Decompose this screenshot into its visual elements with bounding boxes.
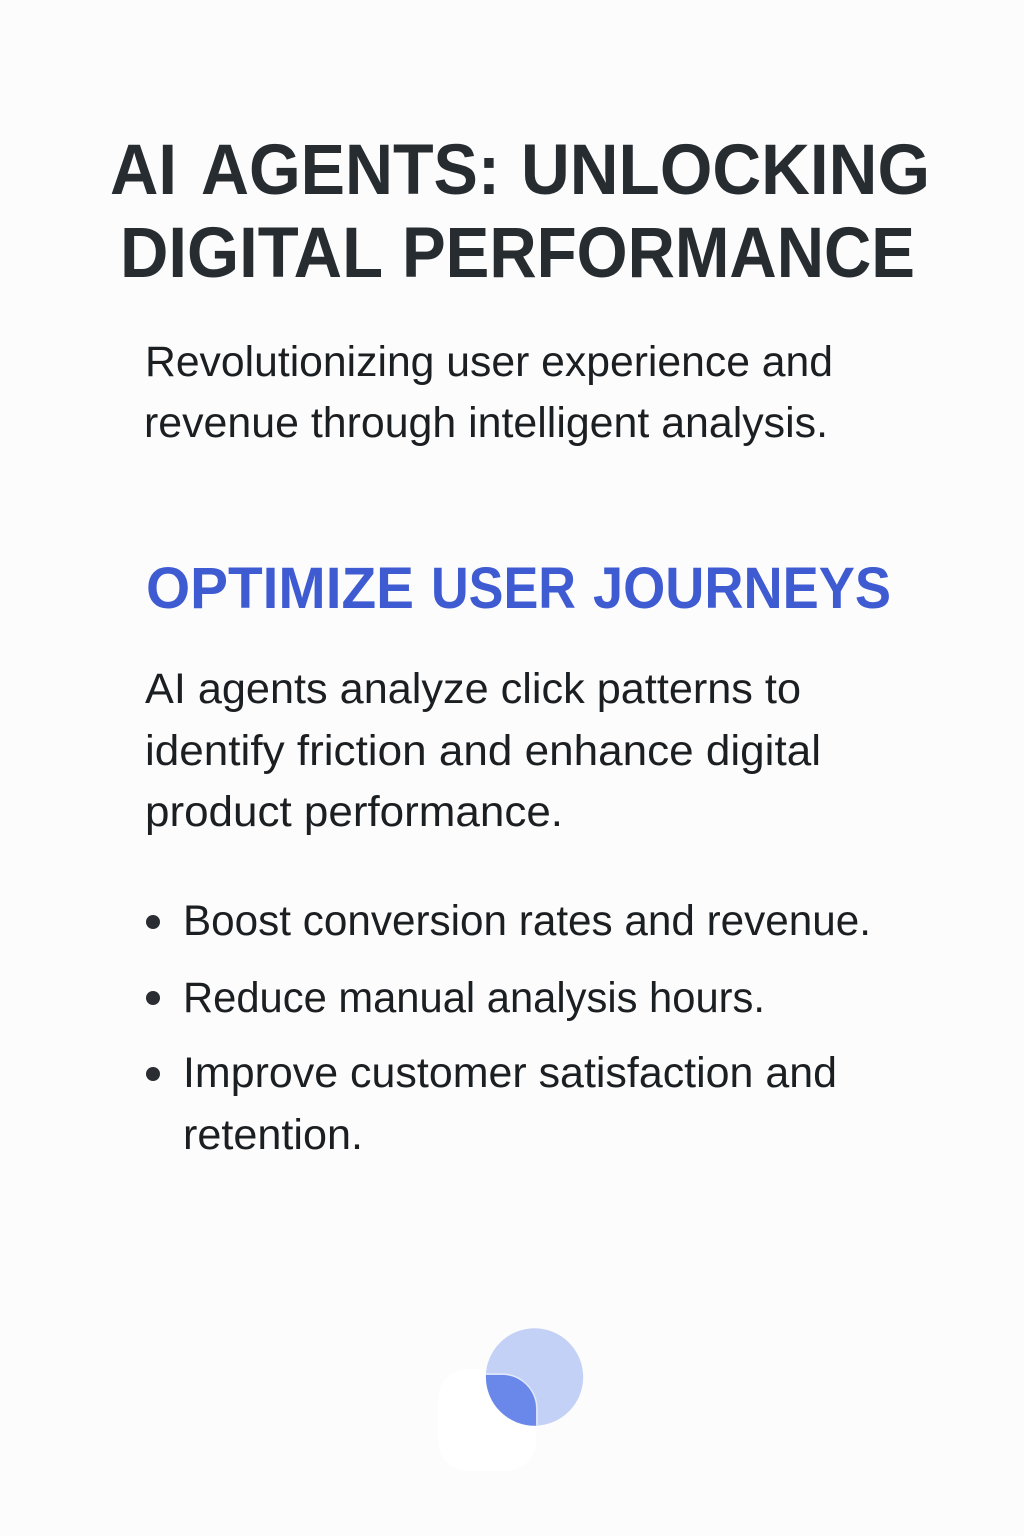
body paragraph [145, 665, 821, 836]
section heading: JOURNEYS [593, 556, 891, 621]
section heading: USER [431, 556, 576, 621]
subtitle: revenue through intelligent analysis. [144, 399, 828, 447]
icon: overlapping shapes logo [438, 1328, 583, 1471]
title: UNLOCKING [521, 131, 930, 210]
title: PERFORMANCE [402, 214, 915, 293]
bullet: customer satisfaction: Improve customer satisfaction and [183, 1049, 837, 1097]
body paragraph: product performance. [145, 788, 563, 836]
title [110, 131, 930, 293]
subtitle: Revolutionizing user experience and [145, 338, 833, 386]
bullet: customer satisfaction: retention. [183, 1111, 363, 1159]
bullet: conversion rates: Boost conversion rates and revenue. [183, 897, 871, 945]
section heading [146, 556, 891, 621]
title: AGENTS: [201, 131, 500, 210]
title: DIGITAL [120, 214, 383, 293]
title: AI [110, 131, 177, 210]
bullet: customer satisfaction [146, 1049, 837, 1159]
body paragraph: identify friction and enhance digital [145, 727, 821, 775]
bullet list [146, 897, 871, 1159]
section heading: OPTIMIZE [146, 556, 414, 621]
body paragraph: AI agents analyze click patterns to [145, 665, 801, 713]
subtitle [144, 338, 833, 447]
bullet: manual analysis: Reduce manual analysis hours. [183, 974, 765, 1022]
